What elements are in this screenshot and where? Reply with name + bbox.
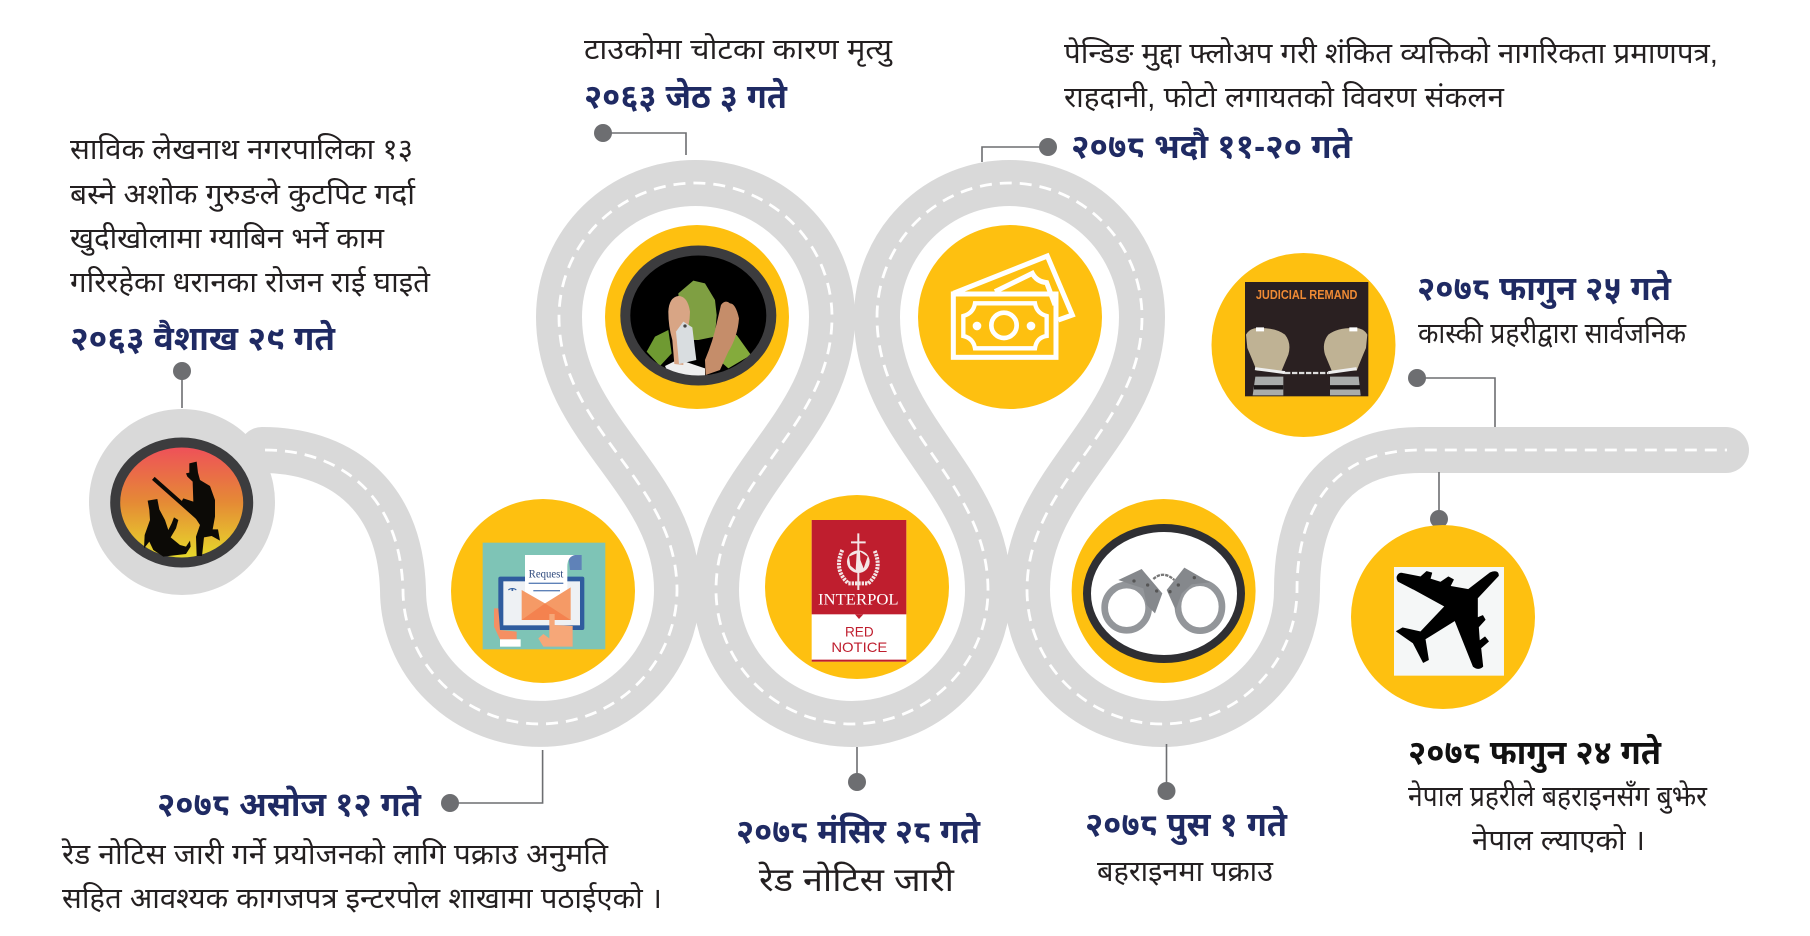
panel: step 1 text: बस्ने अशोक गुरुङले कुटपिट गर्दा	[70, 178, 416, 212]
panel: step 5 text: २०७८ असोज १२ गते	[157, 785, 422, 824]
panel: step 8 text: नेपाल प्रहरीले बहराइनसँग बुझेर	[1408, 780, 1708, 814]
panel: step 5 text	[61, 785, 662, 915]
icon: judicial remand on yellow circle: JUDICIAL REMAND	[1256, 288, 1357, 302]
icon: handcuffs on yellow circle	[1072, 499, 1256, 683]
icon: interpol red notice on yellow circle: NOTICE	[831, 639, 887, 655]
icon: banknotes on yellow circle	[918, 225, 1102, 409]
icon: request on yellow circle	[451, 499, 635, 683]
panel: step 3 text: २०७८ भदौ ११-२० गते	[1071, 127, 1353, 166]
panel: step 7 text	[1085, 805, 1288, 888]
panel: step 6 text: २०७८ मंसिर २८ गते	[736, 812, 981, 851]
panel: step 8 text: नेपाल ल्याएको ।	[1472, 824, 1645, 857]
panel: step 3 text: राहदानी, फोटो लगायतको विवरण संकलन	[1064, 81, 1505, 114]
panel: step 2 text: २०६३ जेठ ३ गते	[584, 77, 788, 116]
panel: step 5 text: रेड नोटिस जारी गर्ने प्रयोजनको लागि पक्राउ अनुमति	[61, 838, 608, 872]
panel: step 1 text: २०६३ वैशाख २९ गते	[70, 319, 336, 358]
panel: step 7 text: बहराइनमा पक्राउ	[1097, 856, 1274, 888]
panel: step 8 text	[1408, 733, 1708, 857]
connector lines and dots	[173, 124, 1495, 812]
icon: interpol red notice on yellow circle: INTERPOL	[818, 591, 899, 608]
icon: interpol red notice on yellow circle	[765, 495, 949, 679]
panel: step 3 text: पेन्डिङ मुद्दा फ्लोअप गरी शंकित व्यक्तिको नागरिकता प्रमाणपत्र,	[1064, 37, 1718, 71]
panel: step 8 text: २०७८ फागुन २४ गते	[1408, 733, 1662, 774]
panel: step 7 text: २०७८ पुस १ गते	[1085, 805, 1288, 846]
panel: step 6 text: रेड नोटिस जारी	[758, 860, 956, 898]
panel: step 1 text: खुदीखोलामा ग्याबिन भर्ने काम	[70, 222, 385, 256]
road	[262, 183, 1727, 724]
panel: step 2 text: टाउकोमा चोटका कारण मृत्यु	[584, 33, 893, 67]
icon: judicial remand on yellow circle	[1212, 253, 1396, 437]
icon: request on yellow circle: Request	[529, 566, 564, 580]
icon: airplane on yellow circle	[1351, 525, 1535, 709]
panel: step 3 text	[1064, 37, 1718, 166]
panel: step 2 text	[584, 33, 893, 116]
icon: interpol red notice on yellow circle: RED	[845, 624, 874, 640]
icon: autopsy feet on yellow circle	[605, 225, 789, 409]
panel: step 4 text: २०७८ फागुन २५ गते	[1417, 269, 1672, 310]
panel: step 4 text: कास्की प्रहरीद्वारा सार्वजनिक	[1418, 317, 1687, 350]
panel: step 1 text	[70, 133, 430, 358]
icon: assault silhouette in grey circle	[89, 409, 275, 595]
panel: step 1 text: साविक लेखनाथ नगरपालिका १३	[70, 133, 413, 166]
panel: step 1 text: गरिरहेका धरानका रोजन राई घाइते	[70, 266, 430, 299]
panel: step 6 text	[736, 812, 981, 898]
panel: step 5 text: सहित आवश्यक कागजपत्र इन्टरपोल शाखामा पठाईएको ।	[62, 882, 662, 915]
panel: step 4 text	[1417, 269, 1687, 350]
